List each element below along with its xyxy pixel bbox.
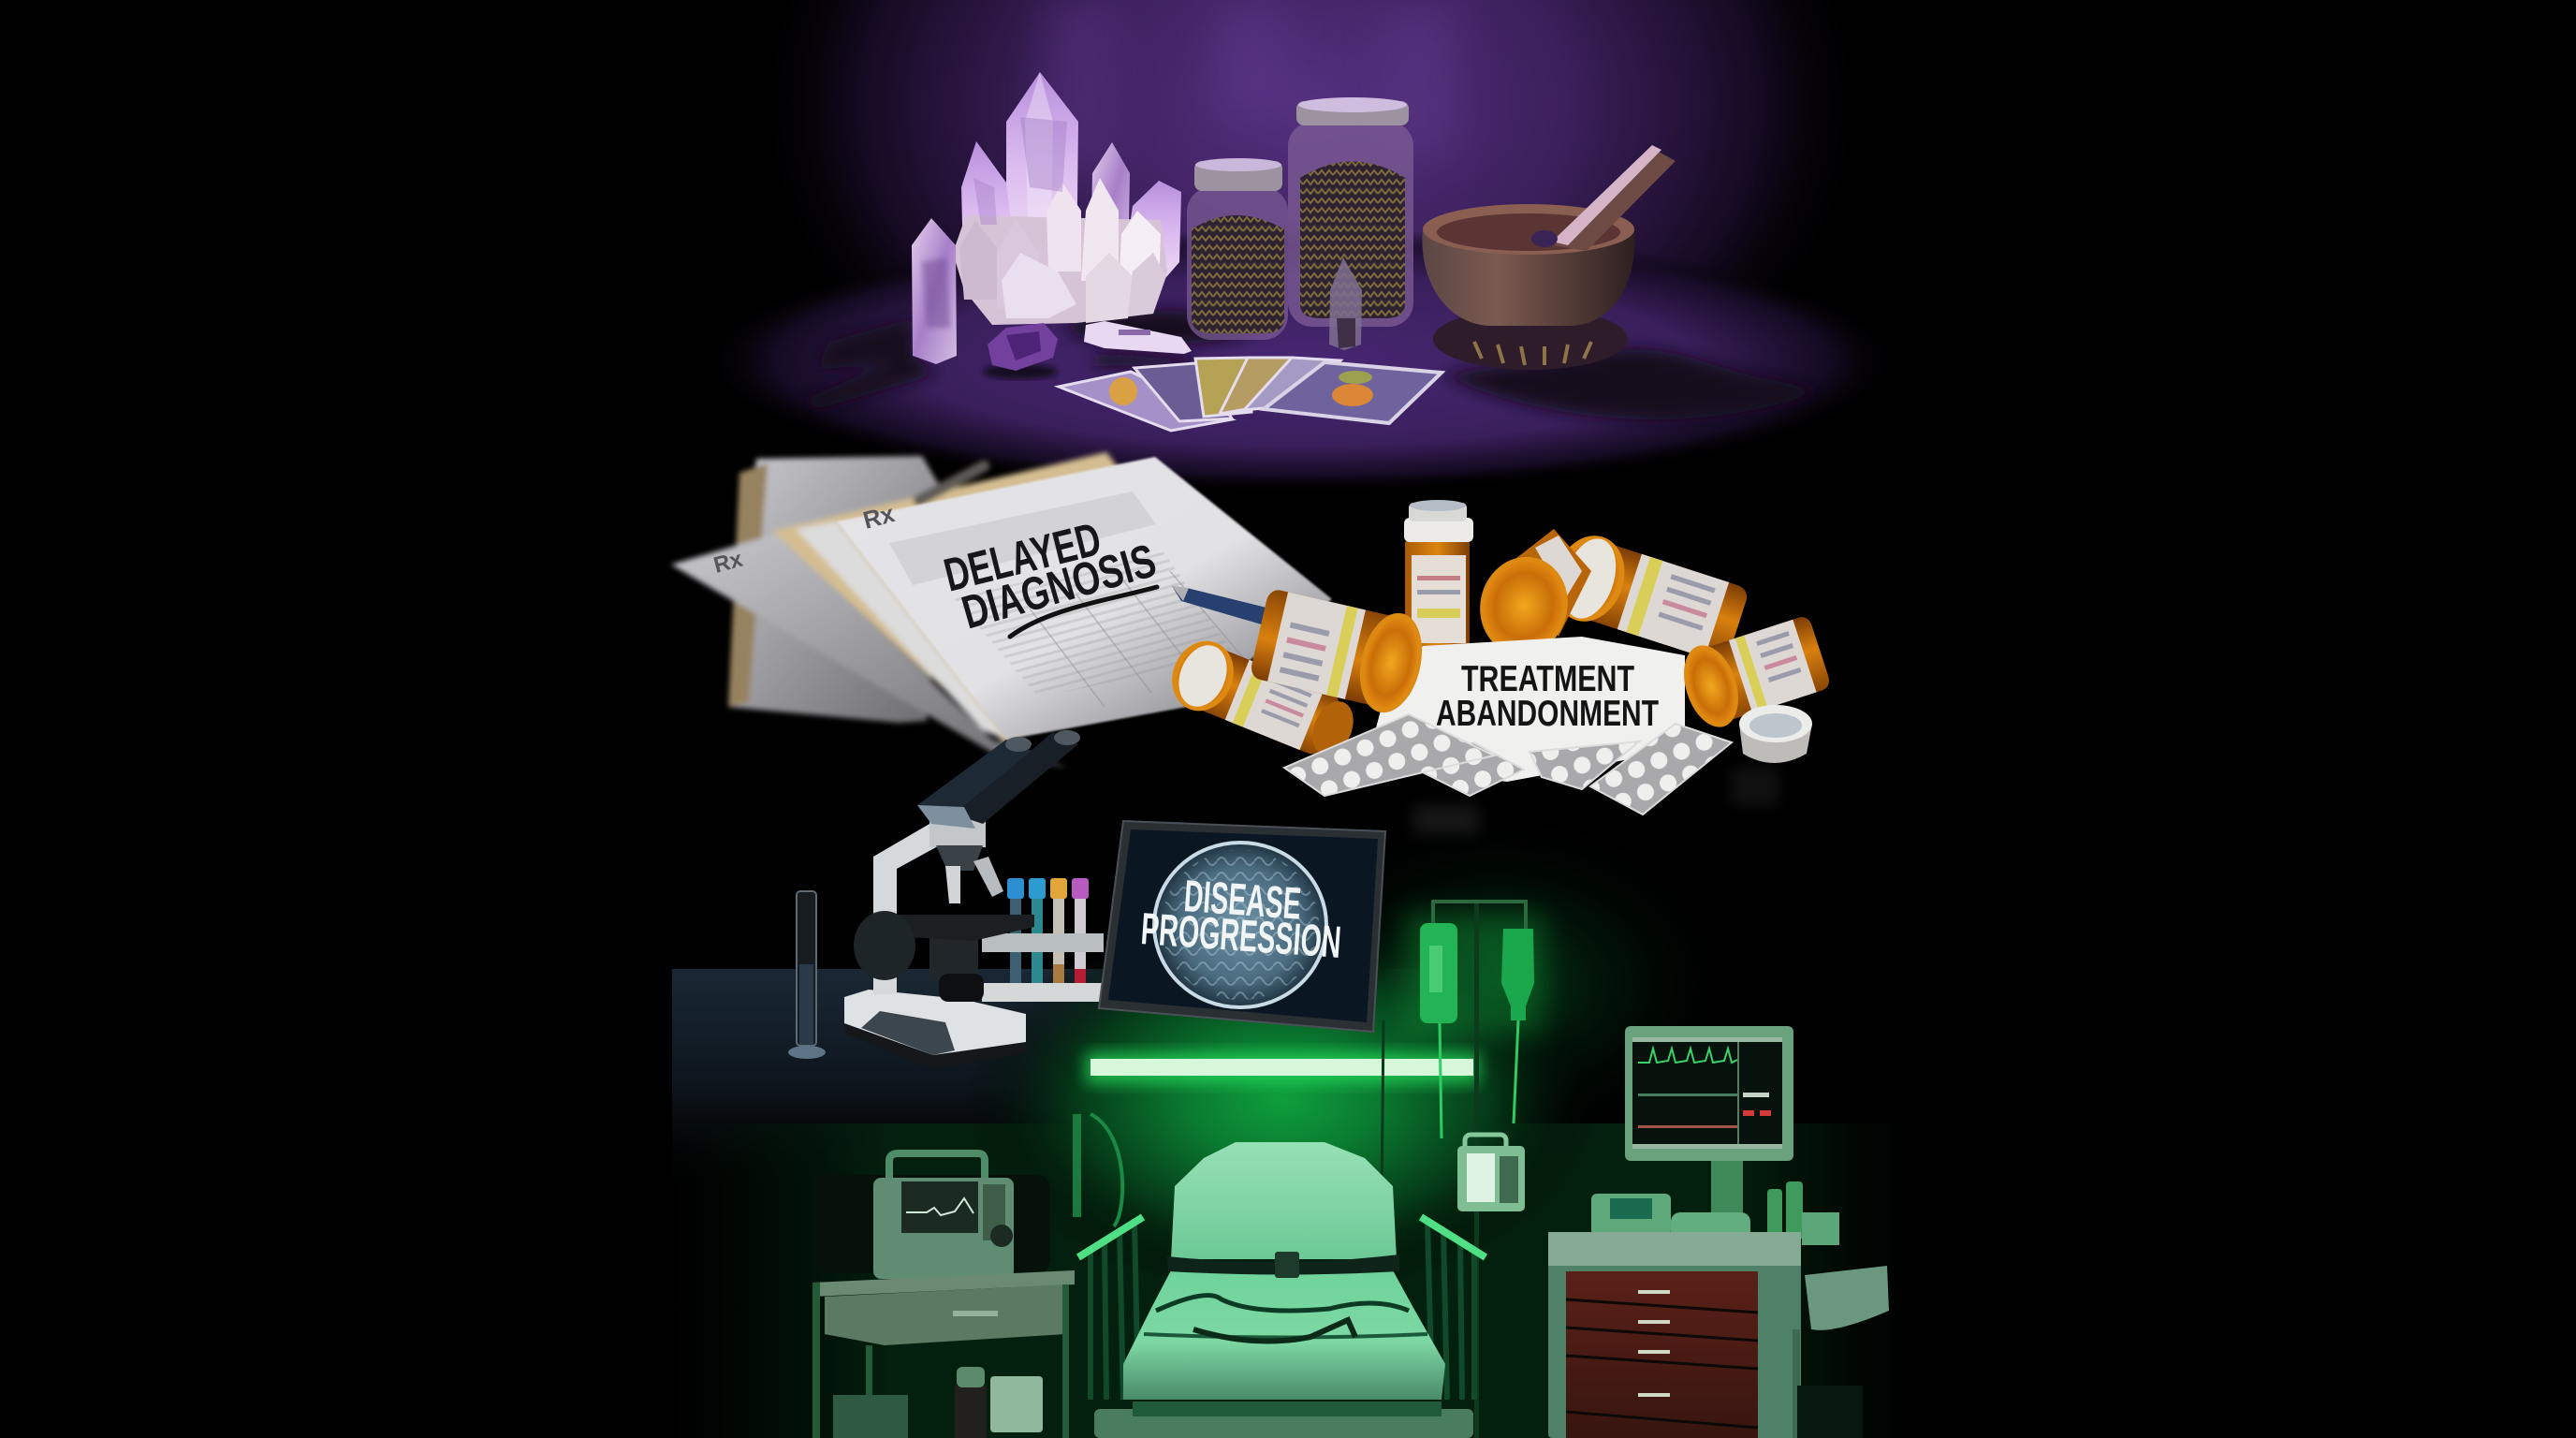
icon: defibrillator <box>812 1153 1050 1279</box>
blister front left <box>1284 714 1494 796</box>
bowl <box>1422 229 1634 326</box>
rail left <box>1078 1217 1143 1400</box>
rx mark: Rx <box>860 499 898 535</box>
pole <box>1474 902 1479 1438</box>
column <box>929 936 978 980</box>
arm <box>873 824 936 994</box>
icon: tarot cards <box>1059 358 1442 431</box>
blister far right <box>1590 724 1732 814</box>
cart body <box>1548 1232 1801 1438</box>
tube teal <box>1029 878 1046 990</box>
icon: front prescription bottles <box>1164 586 1833 761</box>
glowing light bar <box>1086 1052 1479 1084</box>
icon: wall monitor <box>1625 1026 1793 1212</box>
supplies <box>1591 1181 1839 1245</box>
bag glow <box>1404 913 1544 1034</box>
bottle: large open left <box>1249 586 1428 715</box>
icon: standing crystal point <box>912 218 957 364</box>
icon: IV stand and bags <box>1382 902 1544 1438</box>
blister middle right <box>1530 741 1639 789</box>
mallet <box>1554 148 1676 251</box>
tube purple <box>1072 878 1089 990</box>
floor shadows <box>805 311 1825 419</box>
icon: infusion pump <box>1457 1135 1525 1211</box>
handwritten delayed label: DELAYED <box>939 512 1106 602</box>
lamp <box>939 974 984 1002</box>
bottle: right open <box>1677 613 1833 731</box>
icon: prescription bottles <box>1404 500 1750 666</box>
icon: crystal cluster <box>953 72 1181 325</box>
underline <box>1010 587 1157 637</box>
focus knob <box>854 911 915 980</box>
icon: white treatment abandonment card <box>1367 637 1685 782</box>
panel: back papers and folder <box>671 452 1161 768</box>
drawers <box>1566 1271 1758 1438</box>
blister back <box>1423 742 1524 796</box>
icon: hanging cable <box>1073 1114 1122 1226</box>
left crystal <box>961 141 1020 300</box>
bottle: far left capped <box>1164 635 1361 761</box>
icon: test tube rack <box>982 878 1104 1002</box>
small right crystal <box>1090 142 1130 271</box>
panel: delayed diagnosis document <box>711 457 1332 740</box>
cluster points <box>959 178 1166 323</box>
drawer handles <box>1638 1290 1670 1397</box>
panel: green hospital room backdrop <box>670 805 1915 1438</box>
brain scan <box>1154 843 1326 1007</box>
icon: bed <box>1078 1142 1486 1438</box>
far right crystal <box>1121 181 1181 300</box>
base <box>844 990 1026 1055</box>
tall crystal <box>1006 72 1078 281</box>
lower straps <box>1156 1296 1409 1311</box>
icon: amethyst stone <box>983 323 1058 379</box>
icon: tablet with brain scan <box>1099 821 1385 1032</box>
icon: slim crystal <box>1329 257 1362 350</box>
tube yellow <box>1050 878 1067 990</box>
disease label: DISEASE <box>1182 872 1303 930</box>
bottle: capped lying right <box>1547 530 1750 666</box>
icon: herb jar small <box>1187 158 1288 340</box>
tube blue <box>1007 878 1024 990</box>
rail right <box>1421 1217 1486 1400</box>
icon: medical cart <box>1548 1181 1889 1438</box>
body tube <box>929 810 986 847</box>
icon: graduated cylinder <box>788 891 826 1059</box>
bottles on shelf <box>833 1367 1043 1438</box>
bottle: upright with cap <box>1404 500 1473 658</box>
mattress <box>1123 1270 1445 1400</box>
icon: blister packs <box>1284 714 1732 814</box>
icon: clear crystal fragment <box>1084 321 1192 354</box>
crystal highlights <box>1020 117 1067 192</box>
foot <box>844 1023 1026 1069</box>
rx mark on back sheet: Rx <box>711 547 746 579</box>
eyepieces <box>955 732 1078 824</box>
icon: side table <box>812 1270 1075 1438</box>
panel: purple alternative remedies backdrop <box>702 0 1900 506</box>
treatment label: TREATMENT <box>1461 659 1634 699</box>
headrest <box>1171 1142 1397 1259</box>
IV tubes <box>1440 1020 1518 1138</box>
abandonment label: ABANDONMENT <box>1436 694 1659 734</box>
ECG trace <box>1638 1049 1737 1063</box>
monitor arm <box>1711 1161 1743 1212</box>
icon: bottle cap <box>1739 705 1812 763</box>
bag left <box>1420 923 1457 1023</box>
side bin <box>1805 1266 1889 1330</box>
bottle: open rear <box>1472 529 1591 661</box>
progression label: PROGRESSION <box>1139 904 1342 968</box>
stage <box>889 915 1034 941</box>
cluster base <box>953 215 1167 325</box>
objectives <box>973 857 1003 897</box>
icon: microscope <box>844 730 1080 1069</box>
rack <box>982 933 1104 952</box>
handwritten diagnosis label: DIAGNOSIS <box>957 534 1162 639</box>
icon: herb jar large <box>1288 97 1413 327</box>
icon: singing bowl with mallet <box>1422 145 1676 370</box>
light rays <box>1048 0 1460 169</box>
bed foot <box>1094 1409 1473 1438</box>
bag right <box>1501 929 1534 1020</box>
seat strap <box>1167 1252 1399 1278</box>
stand <box>1433 308 1628 370</box>
icon: pen <box>1172 586 1278 627</box>
panel: laboratory table <box>672 969 1442 1184</box>
reflections under pills <box>1413 768 1778 833</box>
